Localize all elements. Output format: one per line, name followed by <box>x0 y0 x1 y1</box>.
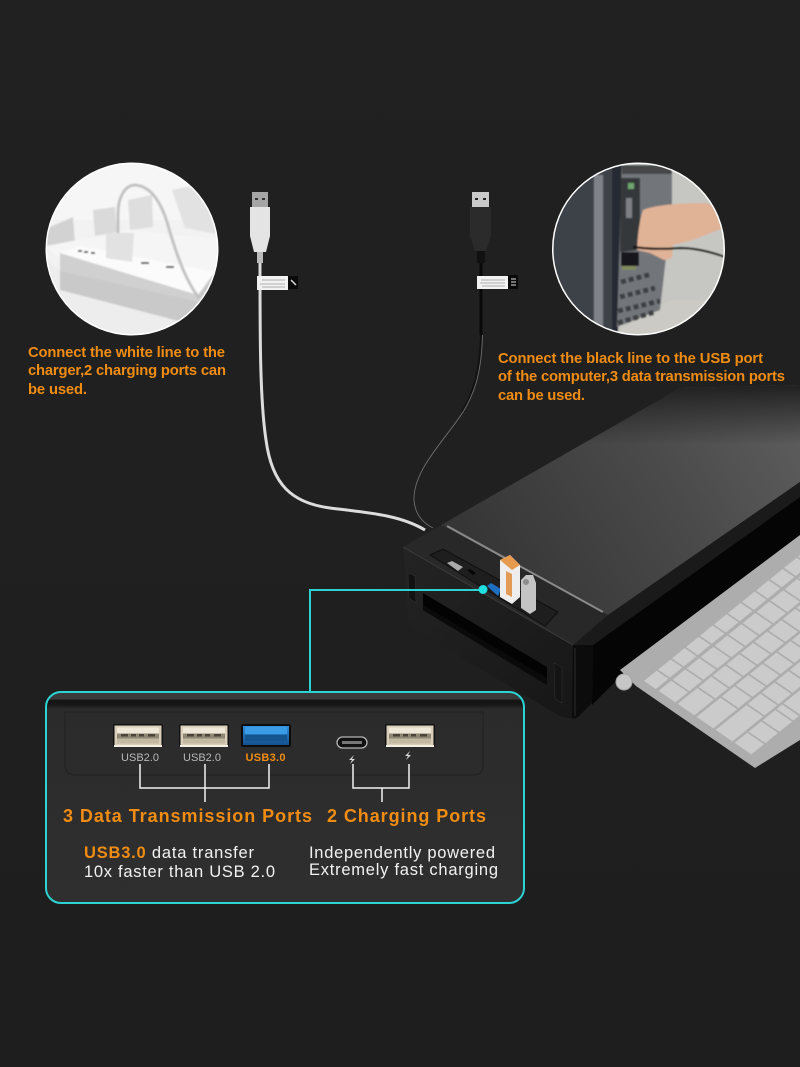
white cable tag <box>257 276 298 290</box>
black USB plug <box>470 192 491 263</box>
keyboard <box>616 521 800 768</box>
text: charging: Independently powered <box>309 844 495 862</box>
white USB plug <box>250 192 270 263</box>
black cable tag <box>477 275 518 289</box>
port labels <box>121 752 286 764</box>
stand USB ports <box>447 561 501 596</box>
caption: white line: be used. <box>28 382 87 398</box>
heading: data ports: 3 Data Transmission Ports <box>63 806 312 826</box>
bracket: data ports <box>140 764 269 802</box>
caption: black line: of the computer,3 data transmission ports <box>498 369 785 385</box>
black USB cable <box>414 192 518 528</box>
caption: white line <box>28 345 226 398</box>
orange USB stick <box>500 555 520 604</box>
USB 2.0 port 2 <box>179 724 229 747</box>
photo: black line plugged in computer <box>550 160 730 340</box>
USB 2.0 port 1 <box>113 724 163 747</box>
bracket: charging ports <box>353 764 409 802</box>
caption: black line: can be used. <box>498 388 585 404</box>
callout connector line <box>310 585 488 692</box>
monitor stand <box>403 385 800 718</box>
lightning icons <box>349 751 411 764</box>
white USB cable <box>250 192 425 530</box>
panel: port detail callout <box>46 692 524 903</box>
charging USB port <box>385 724 435 747</box>
silver USB stick <box>521 575 536 614</box>
keyboard keys <box>650 521 800 749</box>
port labels: USB2.0 <box>121 752 159 764</box>
caption: black line: Connect the black line to the USB port <box>498 351 763 367</box>
heading: charging ports: 2 Charging Ports <box>327 806 486 826</box>
text: USB3.0 speed: 10x faster than USB 2.0 <box>84 863 275 881</box>
text: charging: Extremely fast charging <box>309 861 498 879</box>
USB-C port <box>337 737 367 748</box>
text: USB3.0 speed <box>84 844 275 881</box>
text: USB3.0 speed: USB3.0 data transfer <box>84 844 254 862</box>
USB 3.0 port <box>241 724 291 747</box>
caption: black line <box>498 351 785 404</box>
port labels: USB3.0 <box>246 752 286 764</box>
text: charging <box>309 844 498 879</box>
caption: white line: Connect the white line to the <box>28 345 225 361</box>
caption: white line: charger,2 charging ports can <box>28 363 226 379</box>
port labels: USB2.0 <box>183 752 221 764</box>
photo: white line plugged in charger strip <box>46 162 218 336</box>
